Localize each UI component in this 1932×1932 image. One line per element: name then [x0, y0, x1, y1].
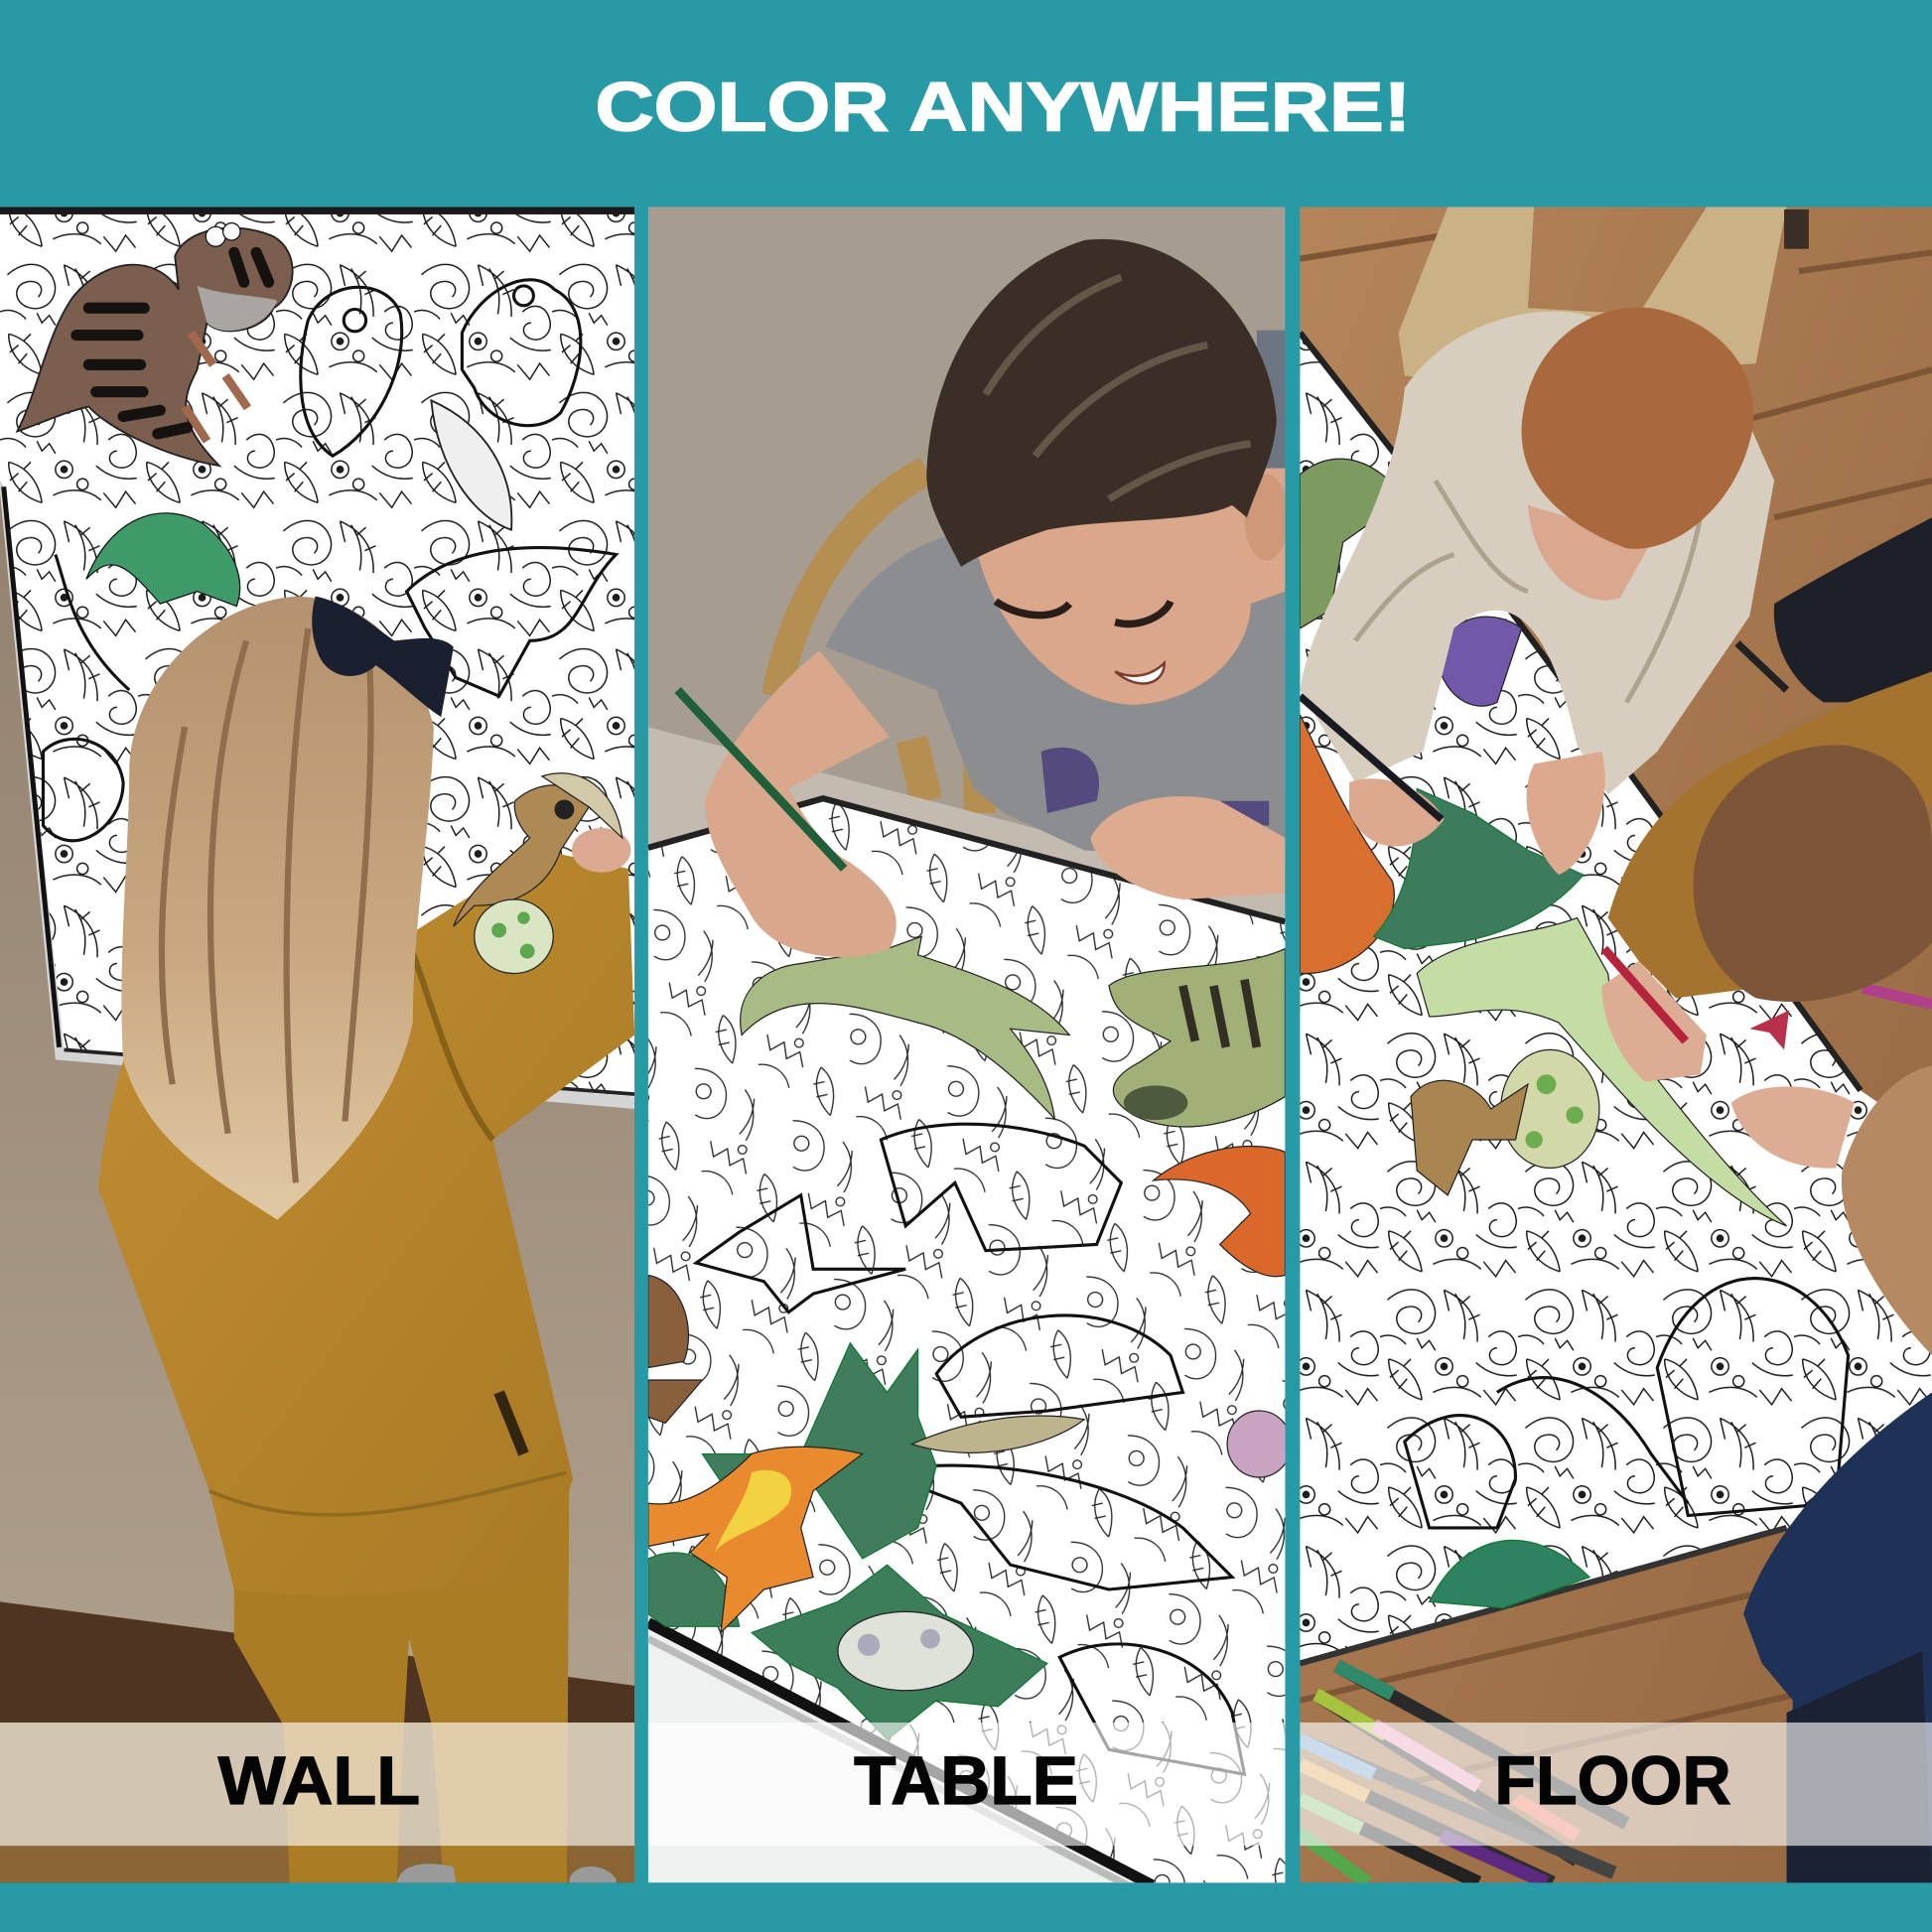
boy's dark hair	[926, 239, 1277, 567]
boy one face	[1528, 505, 1651, 601]
boy's drawing arm	[705, 650, 897, 957]
large leaf sketch	[431, 400, 511, 530]
pale green dinosaur	[1417, 918, 1787, 1226]
poster on wall	[0, 207, 634, 1109]
green striped dinosaur	[1109, 949, 1285, 1127]
boy one trousers	[1399, 207, 1787, 382]
speckled egg	[1227, 1411, 1292, 1477]
girl's socks	[397, 1863, 617, 1882]
boy one hands	[1349, 752, 1605, 875]
wooden floor background	[1300, 207, 1932, 1882]
hatching dinosaur and egg	[1411, 1049, 1599, 1195]
boy's other hand	[1090, 796, 1285, 899]
green long-neck dinosaur	[741, 936, 1069, 1119]
lower green fern and egg	[752, 1565, 1047, 1739]
purple marker	[1863, 988, 1932, 1004]
boy one sweater	[1300, 312, 1774, 794]
door edge	[1257, 331, 1285, 479]
boy's face	[936, 469, 1285, 705]
poster on floor	[1300, 333, 1932, 1663]
hair bow	[312, 597, 454, 717]
boy's eyes and smile	[996, 602, 1171, 684]
panel: wall	[0, 207, 634, 1882]
green pencil	[678, 690, 844, 869]
hair highlights	[986, 277, 1251, 499]
wooden floor	[0, 1723, 634, 1882]
baseboard	[0, 1601, 634, 1882]
brown leaves	[648, 1276, 702, 1423]
boy three navy top	[1743, 1392, 1932, 1882]
orange dinosaur	[1300, 715, 1394, 973]
baby dinosaur and egg	[454, 773, 622, 973]
panel: floor	[1300, 207, 1932, 1882]
label: wall: WALL	[218, 1743, 420, 1819]
girl's trousers	[234, 1478, 569, 1882]
boy's t-shirt	[826, 536, 1285, 863]
caption strip: wall	[0, 1723, 634, 1846]
caption strip: floor	[1300, 1723, 1932, 1846]
caption strip: table	[648, 1723, 1285, 1846]
green pterosaur wing	[86, 513, 240, 607]
label: table: TABLE	[854, 1743, 1078, 1819]
panel: table	[648, 207, 1292, 1885]
hair strands	[162, 628, 371, 1182]
sweater knit lines	[1355, 481, 1701, 702]
boy one marker	[1300, 696, 1442, 819]
green lower leaf	[1430, 1540, 1589, 1608]
outlined dinosaurs	[43, 280, 617, 841]
boy one boot	[1784, 209, 1809, 249]
girl's hand	[572, 828, 630, 873]
boy two sweater	[1608, 671, 1932, 998]
poster on table	[648, 798, 1285, 1885]
red arrow dino tail	[1749, 1011, 1789, 1049]
orange dinosaur	[1154, 1147, 1285, 1277]
girl's sweater	[98, 850, 634, 1595]
tan feather leaf	[911, 1416, 1084, 1452]
boy's ear	[1244, 475, 1289, 561]
boy one ginger hair	[1522, 308, 1753, 549]
title: COLOR ANYWHERE!	[595, 69, 1411, 146]
green foliage cluster	[648, 1343, 936, 1626]
green dinosaur upper left	[1300, 459, 1405, 628]
dark pants at right	[1774, 517, 1932, 702]
shirt print	[1041, 748, 1269, 826]
boy two hair	[1694, 745, 1932, 1002]
wall background	[0, 493, 635, 1882]
white table lower	[648, 1453, 1285, 1882]
floor boards	[1300, 221, 1932, 1787]
brown t-rex	[17, 223, 293, 466]
boy three hair	[1842, 1066, 1932, 1355]
green leaves	[1374, 788, 1584, 949]
fiery baby dinosaurs	[648, 1447, 863, 1632]
table top	[648, 727, 1285, 961]
yellow belly	[715, 1470, 791, 1553]
purple dinosaur	[1436, 617, 1522, 706]
outlined dinosaurs on floor poster	[1405, 1279, 1849, 1528]
boy two arm and hand	[1601, 961, 1855, 1169]
wall background	[648, 207, 1285, 848]
outlined dinosaurs on table poster	[696, 1124, 1244, 1774]
marker set	[1300, 1666, 1626, 1882]
wooden chair	[776, 471, 980, 813]
boy three dark trousers	[1787, 1651, 1932, 1882]
label: floor: FLOOR	[1494, 1743, 1731, 1819]
boy two red marker	[1604, 949, 1686, 1041]
girl's blonde hair	[121, 597, 434, 1220]
